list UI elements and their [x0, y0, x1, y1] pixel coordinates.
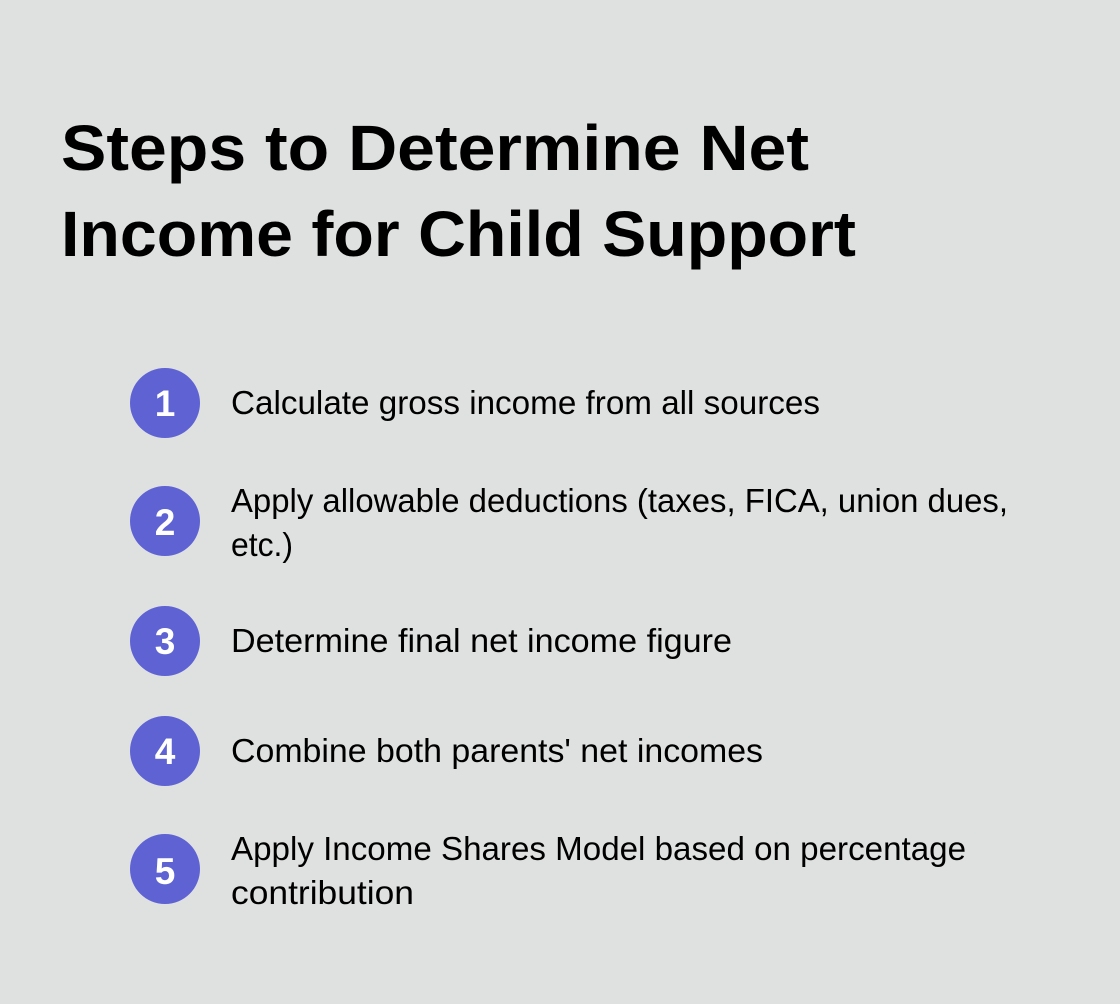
- step 2 number badge: 2: [155, 502, 175, 543]
- step 5 text: contribution: [231, 874, 414, 911]
- step 2 text: Apply allowable deductions (taxes, FICA, union dues,: [231, 482, 1008, 519]
- step 2 number badge: [130, 486, 200, 556]
- step 5: [130, 830, 966, 911]
- title: Income for Child Support: [61, 198, 856, 270]
- step 4: [130, 716, 763, 786]
- step 2 text: [231, 482, 1008, 563]
- step 3 text: Determine final net income figure: [231, 622, 732, 659]
- step 5 text: [231, 830, 966, 911]
- step 4 text: Combine both parents' net incomes: [231, 732, 763, 769]
- step 2 text: etc.): [231, 526, 293, 563]
- step 3: [130, 606, 732, 676]
- step 1 number badge: [130, 368, 200, 438]
- step 5 text: Apply Income Shares Model based on percentage: [231, 830, 966, 867]
- step 3 number badge: 3: [155, 621, 175, 662]
- step 5 number badge: 5: [155, 851, 175, 892]
- step 1 text: Calculate gross income from all sources: [231, 384, 820, 421]
- title: Steps to Determine Net: [61, 112, 809, 184]
- step 3 number badge: [130, 606, 200, 676]
- step 1 number badge: 1: [155, 383, 175, 424]
- title: [61, 112, 856, 270]
- step 2: [130, 482, 1008, 563]
- step 5 number badge: [130, 834, 200, 904]
- step 4 number badge: 4: [155, 731, 176, 772]
- step 4 number badge: [130, 716, 200, 786]
- step 1: [130, 368, 820, 438]
